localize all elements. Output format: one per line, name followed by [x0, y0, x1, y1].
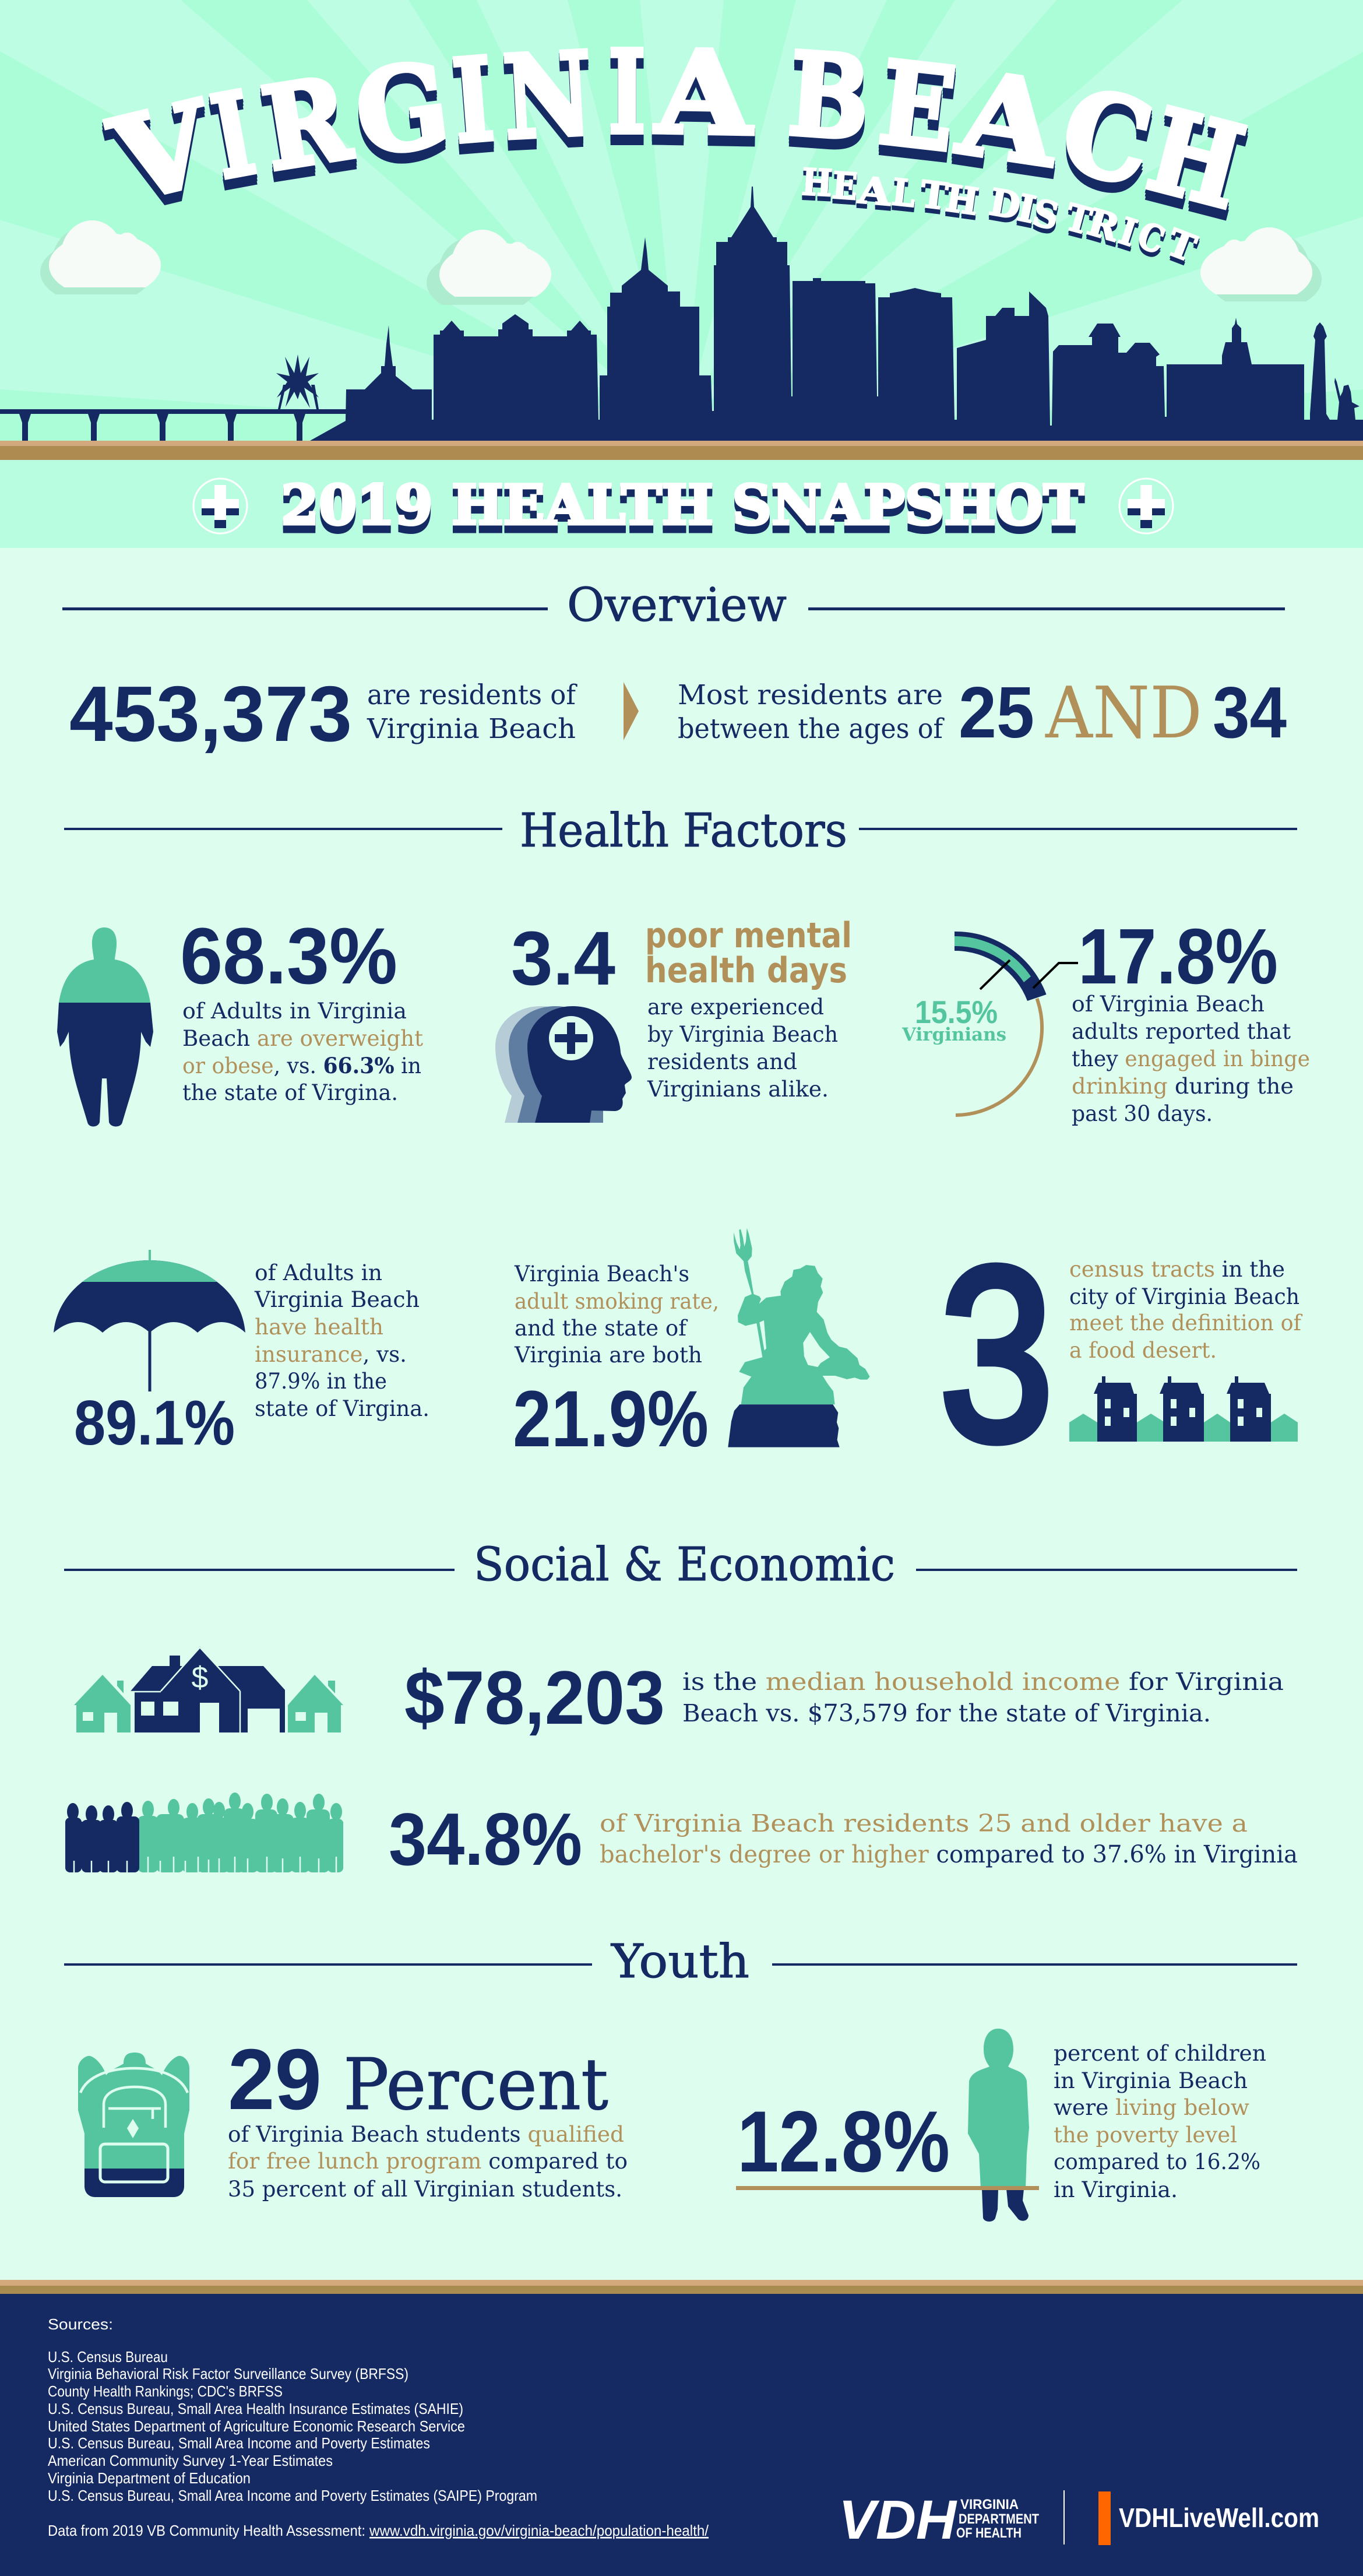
- title: Virginia Beach: C: [1050, 62, 1164, 213]
- section heading: Overview: Overview: [567, 578, 787, 632]
- logo: VDHLiveWell.com: [1098, 2491, 1319, 2545]
- stat: residents: Virginia Beach: [367, 713, 576, 745]
- text block: sources: [48, 2315, 537, 2504]
- subtitle: Health District: T: [918, 172, 950, 219]
- subtitle: Health District: I: [1114, 209, 1142, 255]
- panel: footer: [0, 2294, 1363, 2576]
- text block: sources: U.S. Census Bureau: [48, 2348, 168, 2366]
- text block: sources: U.S. Census Bureau, Small Area Income and Poverty Estimates (SAIPE) Program: [48, 2487, 537, 2504]
- subtitle: Health District: I: [1014, 186, 1040, 231]
- subtitle: Health District: T: [1061, 195, 1096, 243]
- band: footer sand: [0, 2280, 1363, 2294]
- panel: header sunburst background: [0, 0, 1363, 443]
- stat: overweight: Beach are overweight: [182, 1026, 423, 1051]
- icon: child: [968, 2029, 1029, 2222]
- stat: free lunch: for free lunch program compared to: [228, 2149, 628, 2174]
- stat: free lunch: 35 percent of all Virginian students.: [228, 2177, 622, 2202]
- stat: health insurance: [54, 1250, 429, 1459]
- icon: houses with dollar: [74, 1646, 343, 1732]
- text block: data source note: Data from 2019 VB Community Health Assessment:: [48, 2522, 365, 2539]
- logo: Virginia Department of Health: VDH: [839, 2489, 957, 2551]
- stat: child poverty: in Virginia Beach: [1054, 2068, 1248, 2093]
- stat: smoking rate: Virginia Beach's: [514, 1261, 689, 1287]
- stat: binge drinking: of Virginia Beach: [1072, 992, 1265, 1017]
- heading: 2019 Health Snapshot: 2019 HEALTH SNAPSHOT: [281, 473, 1084, 537]
- stat: bachelor's degree: of Virginia Beach residents 25 and older have a: [600, 1809, 1248, 1837]
- subtitle: Health District: D: [987, 180, 1024, 228]
- stat: overweight: [57, 912, 423, 1126]
- stat: food desert: meet the definition of: [1069, 1310, 1302, 1336]
- stat: food desert: a food desert.: [1069, 1338, 1217, 1363]
- subtitle: Health District: A: [856, 168, 893, 214]
- arrow: overview chevron: [624, 682, 639, 740]
- stat: ages: Most residents are: [678, 679, 943, 711]
- stat: bachelor's degree: bachelor's degree or higher compared to 37.6% in Virginia: [600, 1840, 1298, 1868]
- stat: health insurance: 87.9% in the: [255, 1369, 387, 1394]
- subtitle: Health District: H: [943, 177, 981, 223]
- stat: smoking rate: Virginia are both: [514, 1343, 702, 1368]
- stat: median income: Beach vs. $73,579 for the state of Virginia.: [682, 1699, 1211, 1727]
- title: Virginia Beach: R: [254, 51, 359, 197]
- subtitle: Health District: R: [1083, 200, 1125, 250]
- stat: ages: [678, 672, 1287, 754]
- stat: binge drinking: adults reported that: [1072, 1019, 1291, 1044]
- text block: sources: United States Department of Agriculture Economic Research Service: [48, 2417, 465, 2435]
- stat: mental health days: [495, 915, 852, 1123]
- stat: mental health days: 3.4: [511, 915, 615, 1001]
- stat: ages: AND: [1045, 672, 1202, 754]
- title: Virginia Beach: I: [203, 66, 264, 205]
- stat: health insurance: insurance, vs.: [255, 1342, 407, 1367]
- stat: median income: [74, 1646, 1284, 1740]
- stat: mental health days: are experienced: [647, 994, 824, 1020]
- stat: free lunch: [78, 2032, 628, 2202]
- chart: binge drinking gauge: 15.5%: [915, 994, 998, 1030]
- stat: residents: are residents of: [367, 679, 577, 711]
- stat: mental health days: residents and: [647, 1049, 797, 1074]
- subtitle: Health District: H: [801, 160, 833, 205]
- stat: ages: 34: [1213, 673, 1287, 753]
- text block: sources: U.S. Census Bureau, Small Area Health Insurance Estimates (SAHIE): [48, 2400, 463, 2417]
- stat: child poverty: compared to 16.2%: [1054, 2149, 1260, 2174]
- illustration: boardwalk bridge: [0, 409, 347, 441]
- text block: data source note: [48, 2522, 709, 2539]
- stat: smoking rate: and the state of: [515, 1316, 688, 1341]
- icon: backpack: [78, 2053, 189, 2197]
- stat: free lunch: Percent: [343, 2043, 608, 2126]
- section heading: Health Factors: Health Factors: [520, 803, 847, 858]
- stat: overweight: or obese, vs. 66.3% in: [182, 1053, 421, 1078]
- stat: health insurance: state of Virgina.: [255, 1396, 429, 1421]
- subtitle: Health District: T: [1161, 220, 1202, 270]
- title: Virginia Beach: B: [784, 27, 874, 166]
- stat: health insurance: 89.1%: [74, 1387, 235, 1459]
- icon: crowd of people: [65, 1793, 343, 1872]
- stat: smoking rate: adult smoking rate,: [515, 1289, 719, 1314]
- title: Virginia Beach: V: [99, 75, 226, 229]
- icon: houses with dollar: $: [192, 1661, 209, 1695]
- stat: median income: is the median household income for Virginia: [682, 1668, 1284, 1696]
- title: Virginia Beach: G: [348, 37, 456, 182]
- section heading: Social & Economic: [64, 1537, 1297, 1591]
- icon: person: [57, 927, 153, 1126]
- stat: mental health days: Virginians alike.: [647, 1077, 829, 1102]
- panel: snapshot banner: [0, 460, 1363, 548]
- stat: binge drinking: [901, 912, 1310, 1126]
- stat: child poverty: percent of children: [1054, 2041, 1266, 2066]
- section heading: Overview: [62, 578, 1285, 632]
- section heading: Youth: [64, 1934, 1297, 1988]
- stat: binge drinking: 17.8%: [1078, 912, 1278, 1000]
- icon: cloud left: [40, 220, 161, 294]
- stat: mental health days: health days: [645, 950, 847, 991]
- stat: smoking rate: 21.9%: [513, 1375, 709, 1464]
- stat: overweight: the state of Virgina.: [182, 1080, 398, 1105]
- stat: food desert: [939, 1215, 1302, 1492]
- stat: child poverty: [736, 2029, 1266, 2222]
- logo: Virginia Department of Health: DEPARTMENT: [959, 2511, 1039, 2527]
- icon: plus right: [1119, 479, 1173, 533]
- stat: ages: between the ages of: [678, 713, 945, 745]
- stat: ages: 25: [959, 673, 1034, 753]
- stat: child poverty: in Virginia.: [1054, 2177, 1178, 2202]
- stat: free lunch: 29: [228, 2032, 322, 2128]
- text block: sources: Virginia Department of Education: [48, 2469, 251, 2487]
- text block: sources: American Community Survey 1-Year Estimates: [48, 2452, 333, 2469]
- title: Virginia Beach: A: [654, 26, 755, 161]
- subtitle: Health District: L: [890, 170, 918, 216]
- logo: Virginia Department of Health: OF HEALTH: [956, 2525, 1022, 2541]
- stat: binge drinking: past 30 days.: [1072, 1101, 1213, 1126]
- subtitle: Health District: C: [1132, 213, 1171, 262]
- stat: mental health days: poor mental: [645, 915, 852, 956]
- band: sand boardwalk: [0, 441, 1363, 460]
- illustration: city skyline: [310, 187, 1363, 441]
- stat: binge drinking: they engaged in binge: [1072, 1046, 1310, 1071]
- section heading: Social & Economic: Social & Economic: [474, 1537, 895, 1591]
- stat: health insurance: of Adults in: [255, 1260, 382, 1285]
- chart: binge drinking gauge: [901, 932, 1078, 1115]
- stat: health insurance: Virginia Beach: [254, 1287, 420, 1312]
- text block: sources: U.S. Census Bureau, Small Area Income and Poverty Estimates: [48, 2434, 430, 2452]
- icon: ferris wheel star: [276, 354, 319, 409]
- title: Virginia Beach: N: [500, 27, 596, 166]
- stat: residents: [69, 670, 577, 758]
- title: Virginia Beach: E: [874, 36, 962, 177]
- subtitle: Health District: E: [831, 164, 859, 208]
- text block: sources: Sources:: [48, 2315, 113, 2333]
- stat: health insurance: have health: [255, 1315, 383, 1340]
- stat: overweight: 68.3%: [180, 912, 397, 1001]
- stat: child poverty: the poverty level: [1054, 2122, 1237, 2148]
- stat: mental health days: by Virginia Beach: [647, 1022, 838, 1047]
- icon: row of houses: [1069, 1376, 1298, 1442]
- subtitle: Health District: S: [1029, 191, 1063, 238]
- stat: bachelor's degree: [65, 1793, 1298, 1881]
- section heading: Health Factors: [64, 803, 1297, 858]
- title: Virginia Beach: I: [449, 33, 498, 169]
- icon: head with plus: [495, 1006, 632, 1123]
- icon: Neptune statue: [728, 1228, 870, 1447]
- stat: smoking rate: [513, 1228, 870, 1464]
- section heading: Youth: Youth: [611, 1934, 749, 1988]
- icon: umbrella: [54, 1250, 245, 1391]
- title: Virginia Beach: A: [950, 46, 1068, 193]
- stat: free lunch: of Virginia Beach students qualified: [228, 2122, 624, 2147]
- icon: plus left: [193, 479, 247, 533]
- stat: child poverty: were living below: [1054, 2095, 1249, 2120]
- stat: binge drinking: drinking during the: [1072, 1074, 1294, 1099]
- subtitle: Health District: [801, 160, 1202, 270]
- stat: child poverty: 12.8%: [737, 2093, 950, 2190]
- stat: residents: 453,373: [69, 670, 352, 758]
- stat: overweight: of Adults in Virginia: [182, 999, 407, 1024]
- title: Virginia Beach: I: [608, 26, 646, 160]
- stat: bachelor's degree: 34.8%: [389, 1798, 582, 1881]
- icon: cloud right: [1200, 227, 1322, 301]
- logo: Virginia Department of Health: [839, 2489, 1039, 2551]
- logo: Virginia Department of Health: VIRGINIA: [960, 2497, 1019, 2512]
- chart: binge drinking gauge: Virginians: [901, 1024, 1006, 1045]
- stat: food desert: census tracts in the: [1069, 1257, 1285, 1282]
- stat: food desert: 3: [939, 1215, 1054, 1492]
- icon: cloud centre: [427, 230, 551, 305]
- stat: food desert: city of Virginia Beach: [1069, 1284, 1299, 1309]
- text block: sources: Virginia Behavioral Risk Factor Surveillance Survey (BRFSS): [48, 2365, 408, 2382]
- title: Virginia Beach: H: [1136, 83, 1256, 235]
- text block: data source note: www.vdh.virginia.gov/virginia-beach/population-health/: [369, 2522, 709, 2539]
- text block: sources: County Health Rankings; CDC's BRFSS: [48, 2382, 283, 2400]
- title: Virginia Beach: [99, 26, 1256, 235]
- logo: VDHLiveWell.com: VDHLiveWell.com: [1119, 2503, 1319, 2533]
- stat: median income: $78,203: [404, 1655, 665, 1740]
